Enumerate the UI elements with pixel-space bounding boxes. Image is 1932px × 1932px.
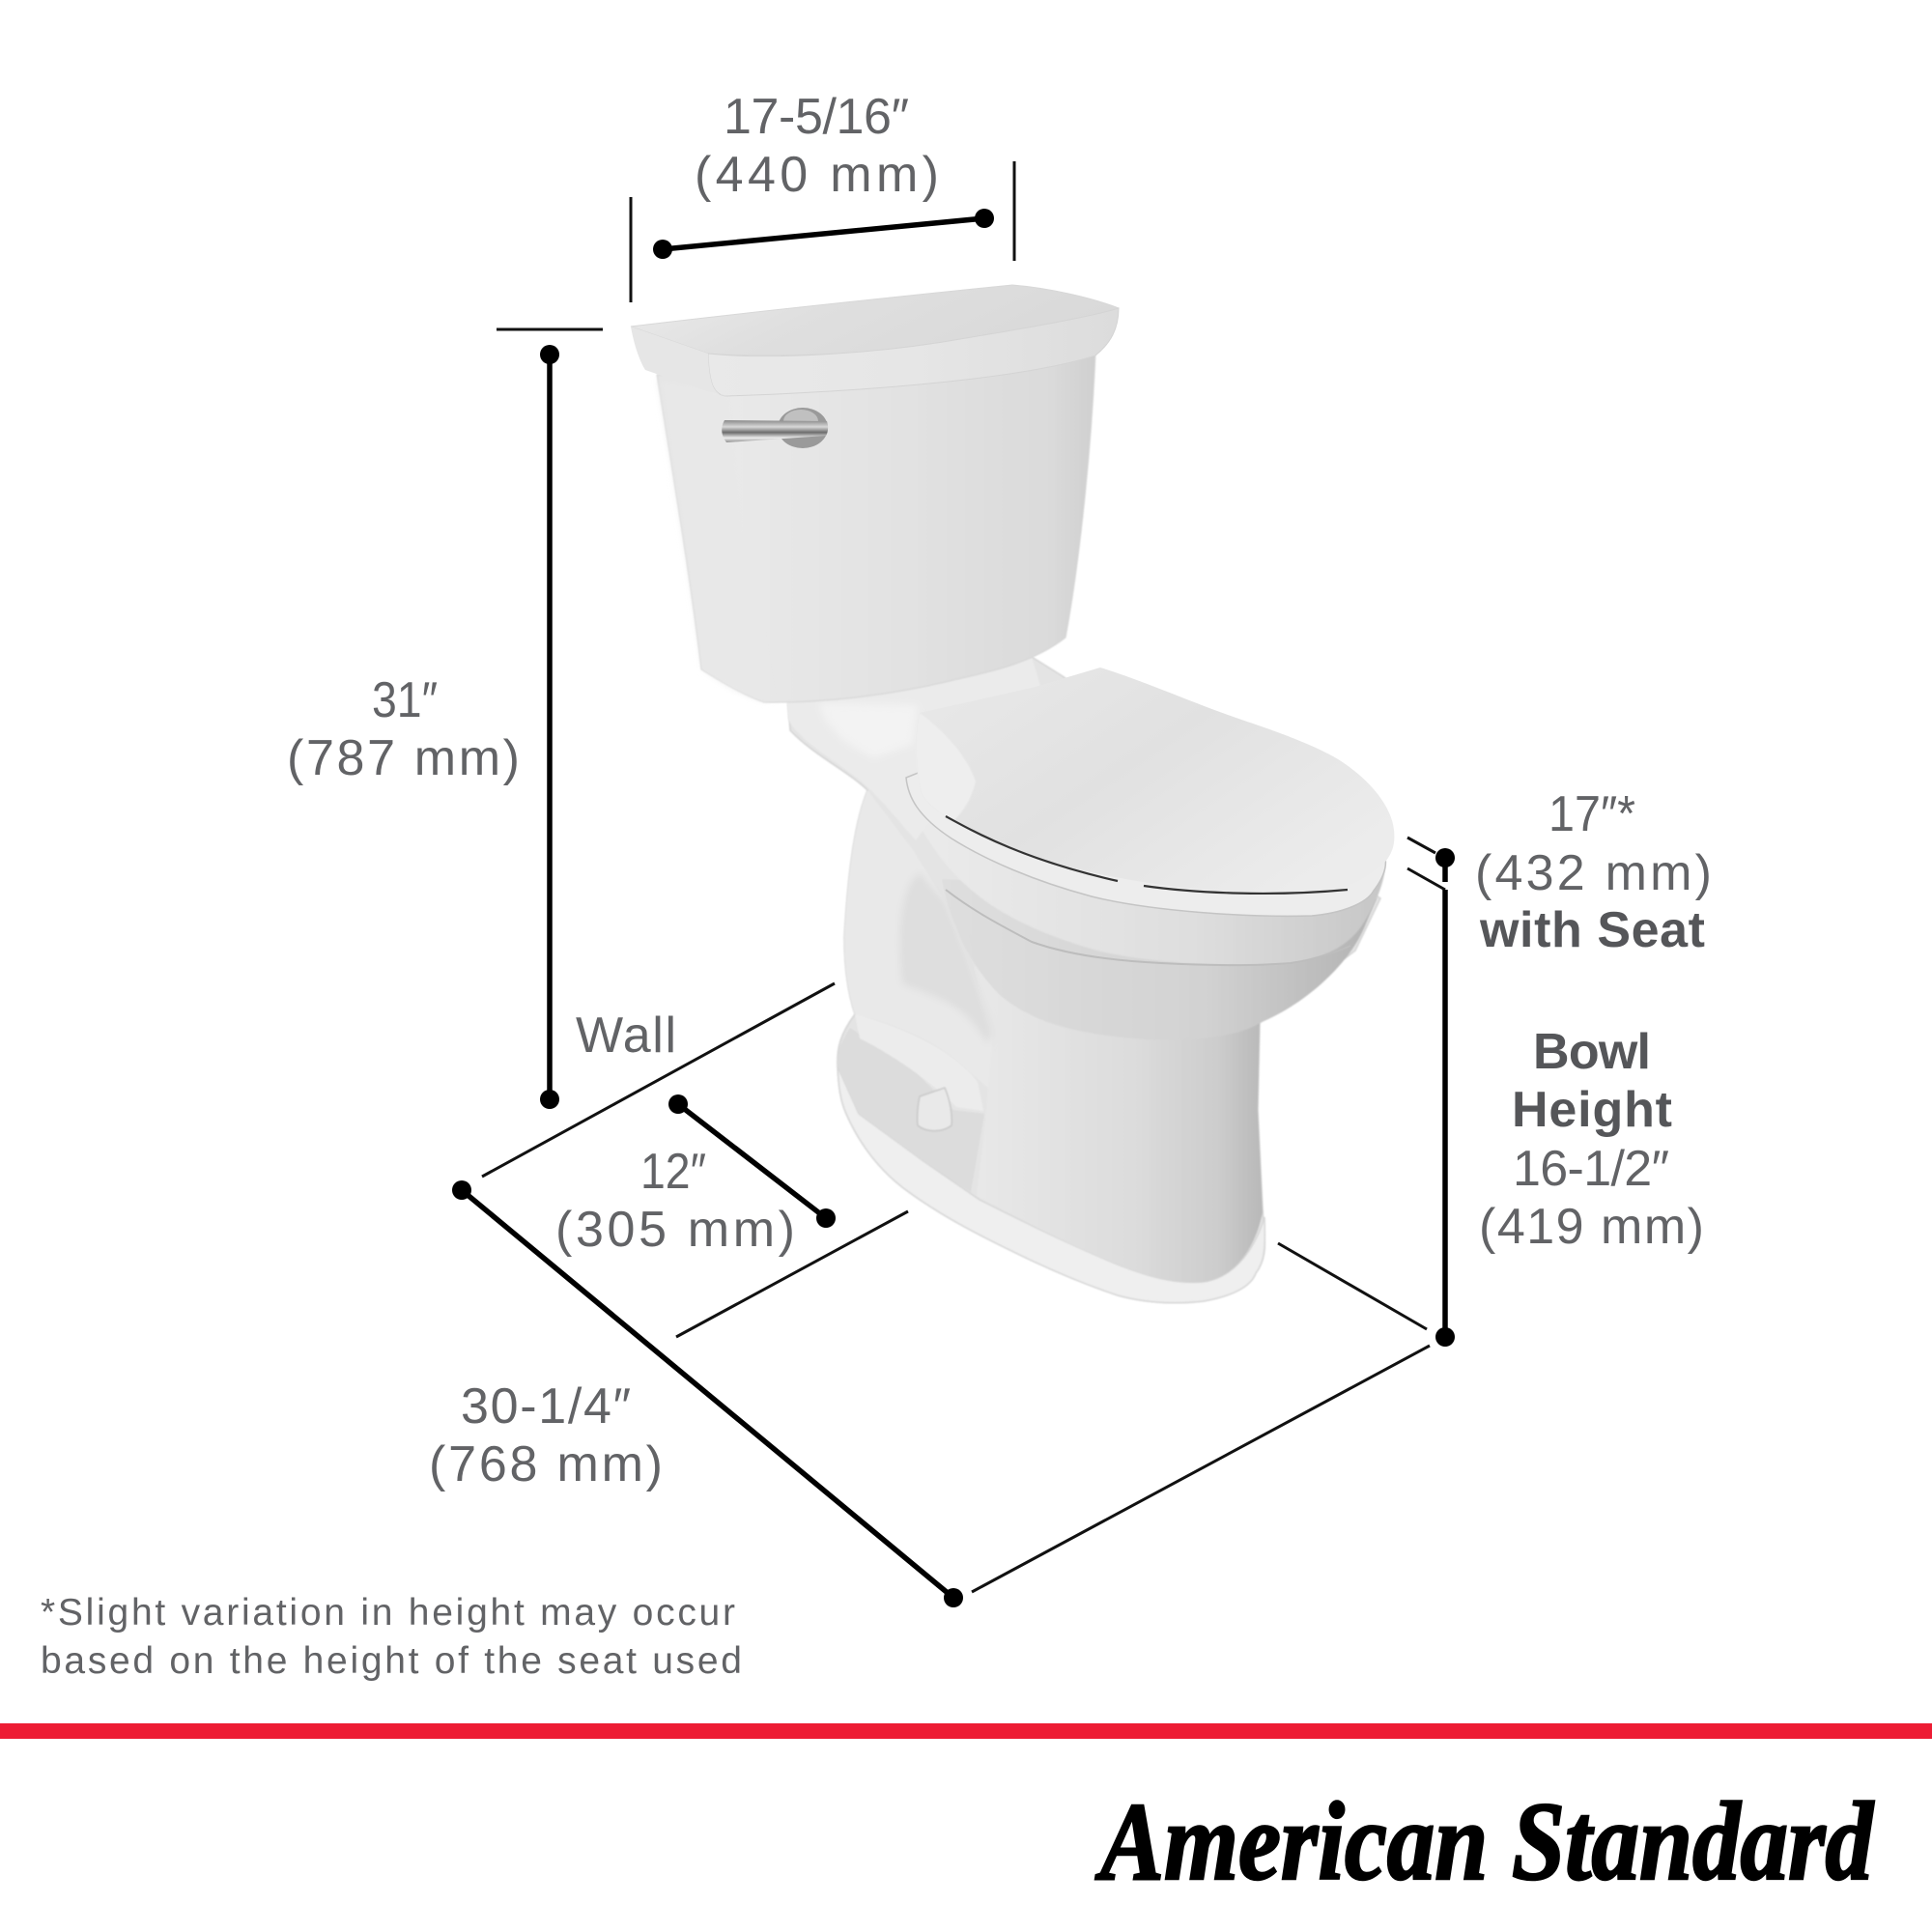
tank body	[657, 354, 1095, 702]
neck shading	[819, 703, 918, 758]
lid front	[708, 308, 1119, 396]
footnote: based on the height of the seat used	[41, 1640, 742, 1682]
trap recess shading	[899, 872, 993, 1045]
footnote	[41, 1592, 742, 1682]
label: rough-in	[555, 1144, 795, 1258]
dimension: bowl height	[972, 786, 1712, 1592]
label: overall depth	[429, 1378, 663, 1492]
flush lever	[722, 408, 828, 448]
label: bowl height: 16-1/2″	[1513, 1141, 1669, 1197]
label: overall depth: (768 mm)	[429, 1436, 663, 1492]
bowl underside	[942, 879, 1377, 1039]
seat gap line	[946, 816, 1348, 894]
red divider bar	[0, 1723, 1932, 1739]
label: height with seat	[1475, 786, 1712, 958]
label: wall: Wall	[576, 1008, 676, 1064]
lever plate	[778, 408, 828, 448]
label: overall height	[287, 672, 520, 786]
base flange band	[838, 1066, 1264, 1303]
dimension: wall rough-in	[482, 983, 908, 1337]
label: bowl height	[1479, 1024, 1704, 1255]
label: overall height: (787 mm)	[287, 730, 520, 786]
lever handle	[722, 420, 828, 442]
label: height with seat: with Seat	[1479, 902, 1705, 958]
label: height with seat: 17″*	[1548, 786, 1635, 842]
bolt cap	[918, 1088, 952, 1131]
bowl rim	[906, 753, 1385, 965]
label: bowl height: Height	[1512, 1082, 1672, 1138]
label: rough-in: (305 mm)	[555, 1202, 795, 1258]
label: tank width	[695, 89, 939, 203]
label: overall depth: 30-1/4″	[461, 1378, 631, 1435]
label: rough-in: 12″	[640, 1144, 706, 1200]
rim edge line	[946, 890, 1350, 965]
label: tank width: (440 mm)	[695, 147, 939, 203]
toilet bowl and pedestal	[788, 657, 1380, 1303]
tank lid	[631, 285, 1119, 396]
footnote: *Slight variation in height may occur	[41, 1592, 735, 1634]
flange top surface	[838, 1028, 984, 1192]
label: overall height: 31″	[372, 672, 438, 728]
seat lid hinge facet	[916, 713, 976, 821]
label: bowl height: (419 mm)	[1479, 1199, 1704, 1255]
lid top	[631, 285, 1119, 355]
dimension: tank width	[631, 89, 1014, 302]
lid side	[631, 327, 727, 396]
dimension: overall depth	[429, 1180, 963, 1607]
label: bowl height: Bowl	[1533, 1024, 1651, 1080]
seat ring	[906, 753, 1385, 916]
label: tank width: 17-5/16″	[724, 89, 909, 145]
seat lid	[916, 668, 1394, 893]
flange tube highlight	[855, 1014, 983, 1111]
tank left face shading	[659, 379, 768, 700]
rear trapway	[844, 790, 993, 1088]
dimension: overall height	[287, 329, 603, 1109]
toilet illustration	[631, 285, 1394, 1303]
label: height with seat: (432 mm)	[1475, 845, 1712, 901]
pedestal column	[974, 966, 1263, 1283]
tank connection neck	[786, 657, 1043, 840]
back silhouette	[788, 657, 1380, 1303]
